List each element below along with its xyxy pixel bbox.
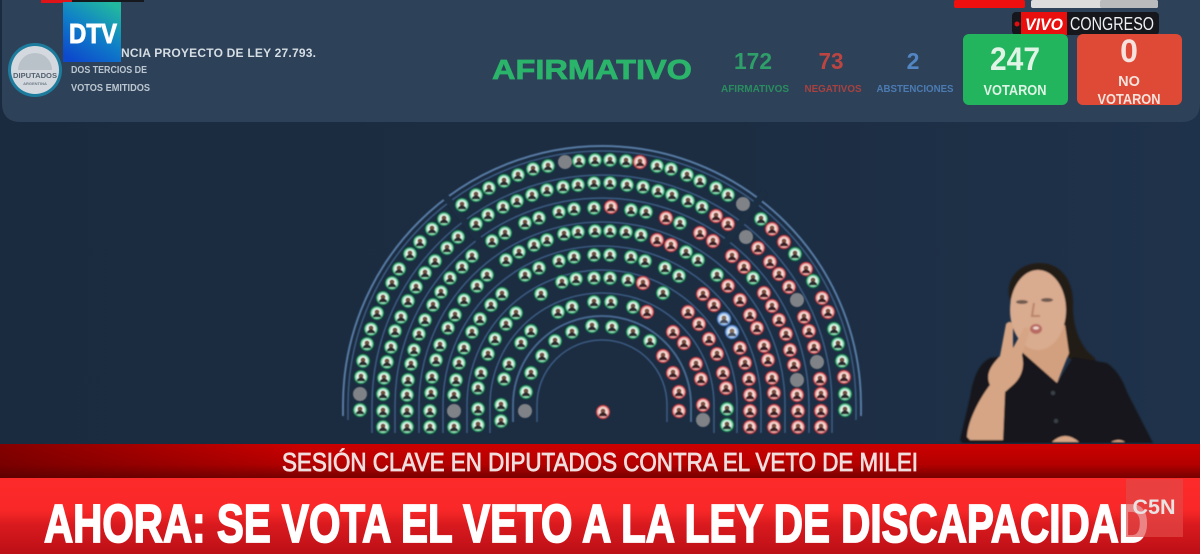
lower third: session bar	[0, 444, 1200, 478]
top clipped broadcast bars	[41, 0, 1158, 8]
text: majority type: VOTOS EMITIDOS	[71, 83, 150, 94]
lower third: session bar: SESIÓN CLAVE EN DIPUTADOS CONTRA EL VETO DE MILEI	[282, 447, 918, 477]
box: 247 votaron: 247	[990, 41, 1040, 77]
row 2 seats	[376, 176, 828, 434]
stat: afirmativos: 172	[734, 48, 772, 74]
box: 0 no votaron: 0	[1120, 33, 1138, 69]
box: 247 votaron: VOTARON	[984, 83, 1046, 99]
chart: hemicycle seats	[343, 146, 861, 434]
row 1 seats	[353, 153, 852, 417]
text: majority type: DOS TERCIOS DE	[71, 65, 147, 76]
facial features	[1016, 298, 1053, 334]
stat: negativos: NEGATIVOS	[804, 83, 862, 95]
text: majority type	[71, 65, 150, 94]
seal: Diputados Argentina: ARGENTINA	[23, 81, 47, 86]
arm and hand with two fingers	[967, 322, 1029, 440]
seats	[353, 153, 852, 434]
blouse buttons	[1051, 391, 1058, 423]
logo: DTV: DTV	[69, 18, 117, 49]
face	[1010, 270, 1066, 350]
row 6 seats	[471, 271, 734, 432]
live badge: VIVO CONGRESO	[1012, 12, 1159, 35]
row 3 seats	[400, 200, 805, 434]
lower hands	[1052, 436, 1125, 442]
stat: negativos	[804, 48, 862, 95]
watermark: C5N	[1126, 479, 1183, 537]
row 8 seats	[518, 319, 686, 418]
stat: afirmativos	[721, 48, 789, 95]
neck and chest	[1020, 325, 1069, 383]
body: black blouse	[960, 353, 1153, 443]
live badge: VIVO CONGRESO: VIVO	[1025, 15, 1063, 34]
box: 0 no votaron: VOTARON	[1098, 92, 1160, 108]
result: AFIRMATIVO: AFIRMATIVO	[492, 54, 692, 85]
row 4 seats	[423, 224, 781, 434]
logo: DTV	[63, 2, 121, 62]
watermark: C5N: C5N	[1132, 496, 1176, 519]
row 5 seats	[447, 248, 757, 434]
presidency seat	[596, 405, 610, 419]
stat: afirmativos: AFIRMATIVOS	[721, 83, 789, 95]
hair back	[1009, 263, 1096, 364]
row 7 seats	[494, 295, 710, 428]
arcs between rows	[343, 146, 861, 433]
stat: abstenciones	[876, 48, 954, 95]
heading: law project: NCIA PROYECTO DE LEY 27.793.	[121, 46, 316, 60]
live badge: VIVO CONGRESO: CONGRESO	[1070, 14, 1154, 34]
box: 0 no votaron: NO	[1118, 74, 1140, 90]
stat: negativos: 73	[818, 48, 844, 74]
seal: Diputados Argentina: DIPUTADOS	[13, 71, 57, 80]
stat: abstenciones: 2	[907, 48, 919, 74]
sign language interpreter	[960, 263, 1153, 443]
box: 247 votaron	[963, 34, 1068, 105]
stat: abstenciones: ABSTENCIONES	[876, 83, 954, 95]
seal: Diputados Argentina	[8, 43, 62, 97]
panel: top vote header	[2, 0, 1200, 122]
box: 0 no votaron	[1077, 33, 1182, 108]
